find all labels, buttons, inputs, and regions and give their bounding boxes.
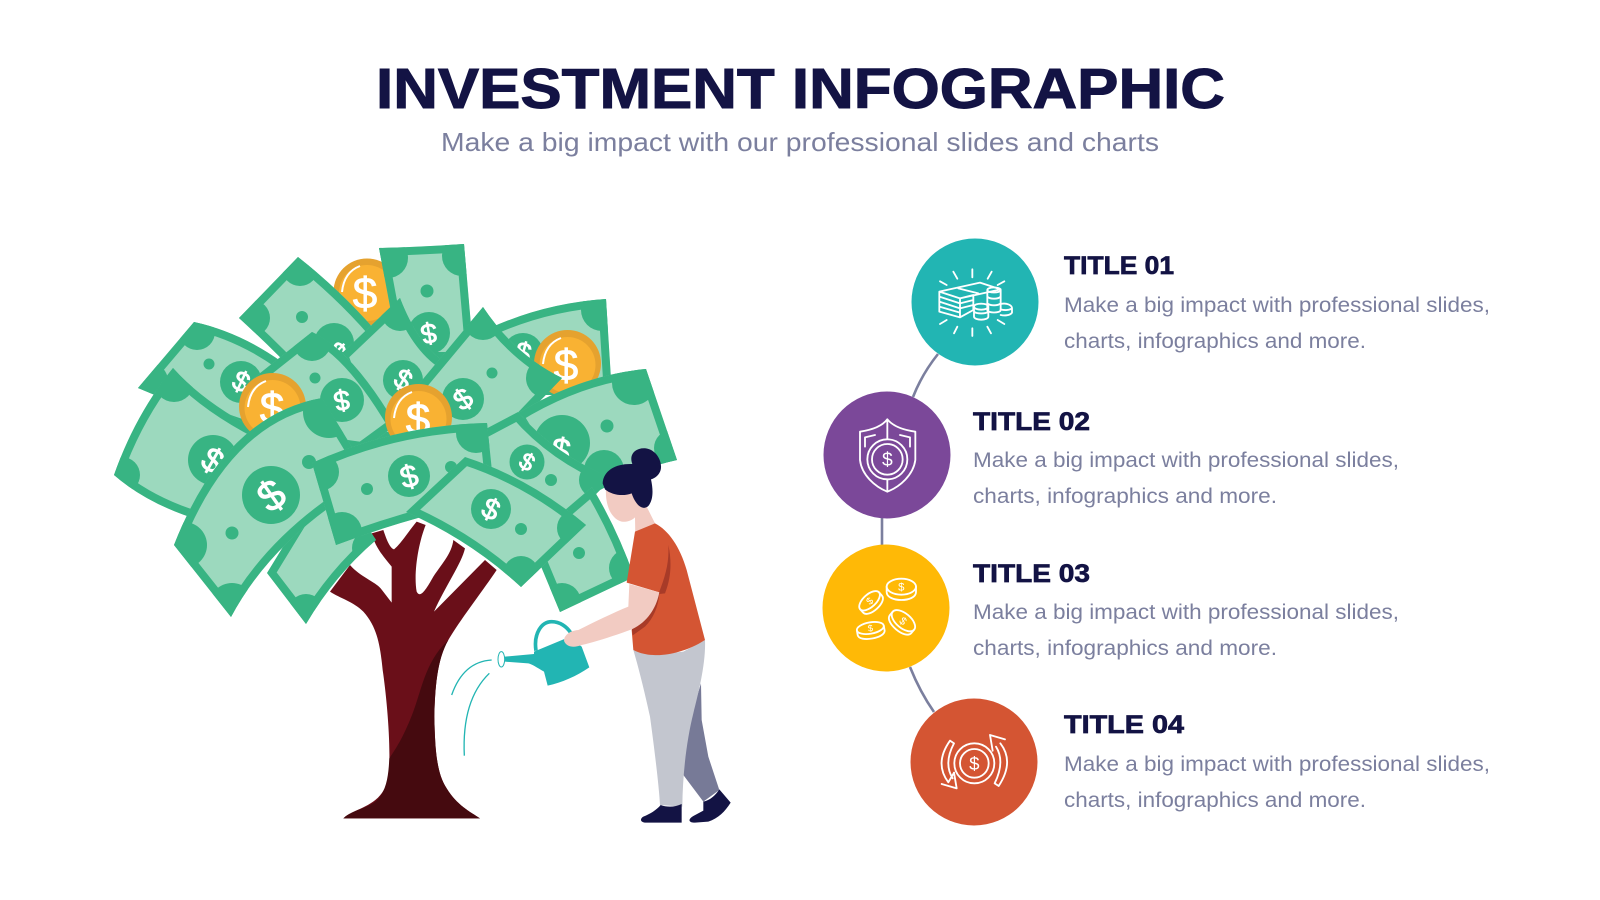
icon: dollar with rotating arrows — [942, 735, 1007, 788]
title 01: TITLE 01 — [1064, 252, 1174, 280]
bill: left upper: $ — [228, 364, 255, 399]
icon: scattered coins — [856, 579, 919, 641]
bill: top upright: $ — [418, 317, 439, 350]
icon: scattered coins: $ — [898, 582, 905, 594]
arm — [564, 584, 659, 647]
item 02 — [824, 392, 1399, 518]
bill: centre right: $ — [448, 382, 479, 418]
icon: scattered coins: $ — [867, 623, 875, 634]
circle 02 — [824, 392, 950, 518]
bill: right front — [406, 457, 593, 592]
coin: right: $ — [554, 341, 578, 390]
coin: right — [534, 330, 601, 397]
bill: centre front: $ — [396, 457, 422, 496]
shoes — [641, 789, 731, 823]
text 03: charts, infographics and more. — [973, 636, 1277, 660]
text 01 — [1064, 293, 1490, 353]
icon: scattered coins: $ — [897, 615, 909, 628]
legs — [683, 683, 719, 802]
coin: left: $ — [260, 384, 284, 433]
coin: centre — [385, 384, 452, 451]
bill: far right: $ — [548, 431, 573, 471]
circle 01 — [912, 238, 1038, 366]
coin: left — [239, 373, 306, 440]
shirt — [627, 523, 705, 655]
tree trunk — [330, 522, 497, 818]
text 04: charts, infographics and more. — [1064, 788, 1366, 812]
person — [564, 448, 731, 823]
bill: right middle: $ — [514, 447, 539, 477]
circle 04 — [910, 698, 1038, 826]
bill: top left diamond — [239, 257, 371, 358]
icon: dollar shield — [860, 419, 915, 492]
bill: top left diamond: $ — [321, 336, 353, 367]
bill: centre back — [343, 298, 439, 440]
bill: big front left: $ — [248, 469, 294, 521]
bill: far right — [520, 369, 677, 490]
subtitle: Make a big impact with our professional slides and charts — [441, 127, 1159, 157]
connector lines — [882, 354, 938, 712]
hair — [603, 448, 661, 508]
text 01: Make a big impact with professional slides, — [1064, 293, 1490, 317]
bill: back right: $ — [512, 336, 535, 370]
trunk shadow — [343, 640, 480, 818]
bill: centre back: $ — [389, 362, 418, 397]
bill: lower right — [542, 487, 630, 612]
coin: top — [334, 258, 400, 326]
bill: lower back — [267, 510, 376, 624]
text 03: Make a big impact with professional slides, — [973, 600, 1399, 624]
watering can — [452, 622, 589, 756]
title: INVESTMENT INFOGRAPHIC — [376, 57, 1225, 121]
title 03: TITLE 03 — [973, 560, 1090, 588]
text 03 — [973, 600, 1399, 660]
head and neck — [606, 487, 657, 537]
item 03 — [822, 544, 1399, 672]
text 04 — [1064, 752, 1490, 812]
icon: money stack with coins — [939, 269, 1012, 336]
icon: dollar shield: $ — [882, 450, 893, 471]
shirt shadow — [632, 545, 671, 635]
bill: big left: $ — [195, 440, 230, 482]
text 02: charts, infographics and more. — [973, 484, 1277, 508]
bill: centre left: $ — [331, 384, 352, 417]
bill: right front: $ — [477, 492, 505, 528]
illustration: money tree — [104, 236, 731, 823]
title 02: TITLE 02 — [973, 408, 1090, 436]
bill: right middle — [488, 412, 600, 509]
title 04: TITLE 04 — [1064, 711, 1184, 739]
item 04 — [910, 698, 1490, 826]
bill: centre front — [313, 423, 492, 545]
text 04: Make a big impact with professional slides, — [1064, 752, 1490, 776]
bill: left upper — [138, 322, 278, 422]
text 02 — [973, 448, 1399, 508]
water arcs — [452, 660, 492, 756]
text 02: Make a big impact with professional slides, — [973, 448, 1399, 472]
circle 03 — [822, 544, 950, 672]
icon: dollar with rotating arrows: $ — [969, 753, 980, 774]
text 01: charts, infographics and more. — [1064, 329, 1366, 353]
icon: scattered coins: $ — [865, 595, 876, 608]
bill: top upright — [379, 244, 471, 358]
item 01 — [912, 238, 1490, 366]
coin: centre: $ — [406, 395, 430, 444]
bill: centre right — [419, 307, 562, 428]
bill: centre left — [245, 332, 388, 447]
bill: big left — [114, 368, 250, 516]
bill: big front left — [174, 398, 352, 617]
coin: top: $ — [353, 269, 377, 318]
bill: back right — [496, 299, 611, 395]
